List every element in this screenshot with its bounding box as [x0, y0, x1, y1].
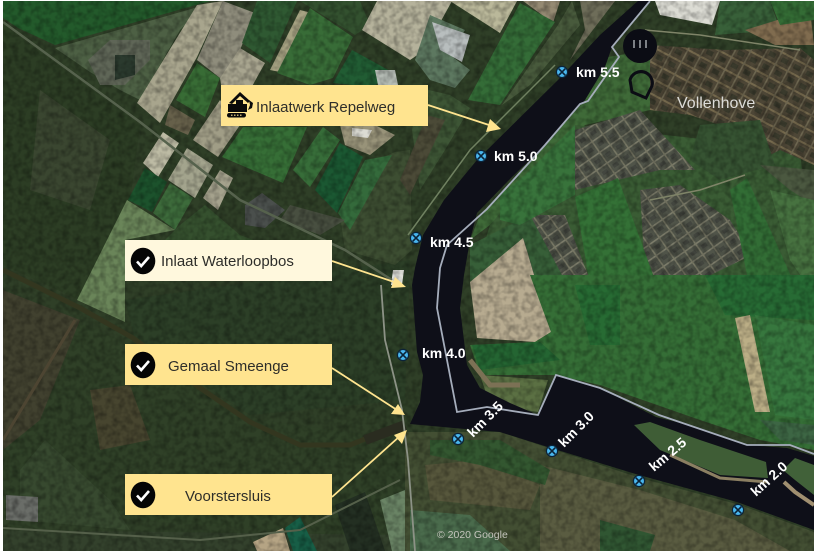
river islands: [470, 360, 814, 505]
km 2.5: [633, 434, 689, 487]
callout: Voorstersluis: [125, 474, 332, 515]
icon: check: [131, 482, 155, 508]
callout: Inlaat Waterloopbos: [125, 240, 332, 281]
arrow: Voorstersluis: [332, 430, 407, 497]
top and central farm fields: [3, 1, 452, 322]
Vollenhove town and neighbourhoods: [470, 45, 814, 342]
harbour basins: [623, 29, 657, 98]
callout: Inlaatwerk Repelweg: Inlaatwerk Repelweg: [256, 99, 395, 116]
callout: Gemaal Smeenge: Gemaal Smeenge: [168, 358, 289, 375]
callout: Voorstersluis: Voorstersluis: [185, 488, 271, 505]
km 2.5: km 2.5: [646, 434, 689, 474]
km 3.5: [452, 398, 506, 445]
km 5.0: [475, 148, 538, 164]
icon: excavator: [227, 92, 253, 118]
km 4.5: km 4.5: [430, 234, 474, 250]
south bank: [253, 432, 814, 551]
arrow: Waterloopbos: [332, 261, 406, 288]
km 2.0: [732, 458, 791, 516]
km 5.5: km 5.5: [576, 64, 620, 80]
km 4.0: [397, 345, 466, 361]
west forest and wetland: [3, 90, 412, 530]
callout: Gemaal Smeenge: [125, 344, 332, 385]
arrow: Repelweg: [428, 105, 501, 132]
south-east polder fields: [470, 275, 814, 450]
km markers: [397, 64, 791, 516]
icon: check: [131, 248, 155, 274]
Google copyright: © 2020 Google: [437, 529, 508, 541]
callout: Inlaatwerk Repelweg: [221, 85, 428, 126]
km 2.0: km 2.0: [747, 458, 791, 499]
km 5.5: [556, 64, 620, 80]
dyke line in water: [437, 1, 814, 454]
river Vollenhover Kanaal: [410, 1, 814, 530]
arrow: Gemaal Smeenge: [332, 368, 405, 415]
km 3.5: km 3.5: [464, 398, 506, 440]
icon: check: [131, 352, 155, 378]
km 5.0: km 5.0: [494, 148, 538, 164]
km 4.0: km 4.0: [422, 345, 466, 361]
place name Vollenhove: Vollenhove: [677, 95, 755, 112]
callout: Inlaat Waterloopbos: Inlaat Waterloopbos: [161, 253, 294, 270]
km 4.5: [410, 232, 474, 250]
north fields and company sites: [400, 1, 814, 195]
km 3.0: km 3.0: [555, 408, 597, 450]
